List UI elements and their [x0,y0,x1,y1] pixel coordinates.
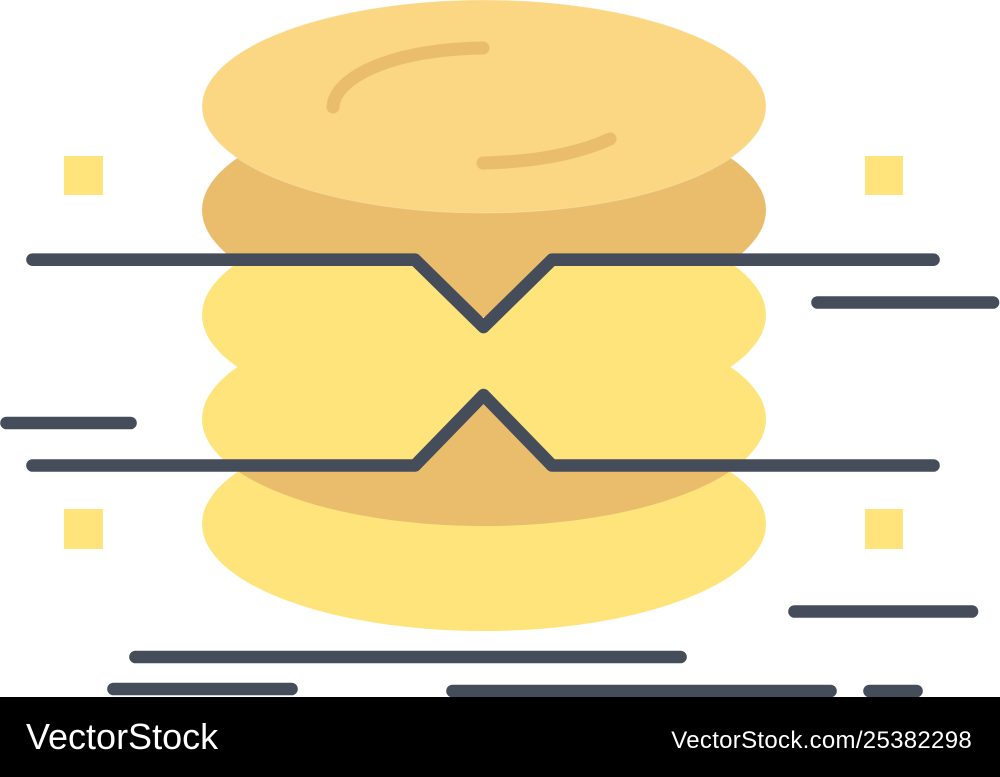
speed lines [6,302,993,691]
lower middle disc with notch [202,367,766,460]
lower darker disc [238,404,730,526]
footer bar [0,697,1000,777]
upper crack line [32,260,934,327]
lower crack line [32,395,934,466]
top disc highlight right [483,139,610,163]
bottom disc [202,417,766,631]
top disc [202,0,766,213]
brand name: VectorStock [26,716,218,757]
squares [64,156,903,549]
top disc highlight left [333,48,483,107]
upper darker disc [202,158,766,317]
image id url: VectorStock.com/25382298 [671,727,972,754]
upper middle disc [202,266,766,367]
